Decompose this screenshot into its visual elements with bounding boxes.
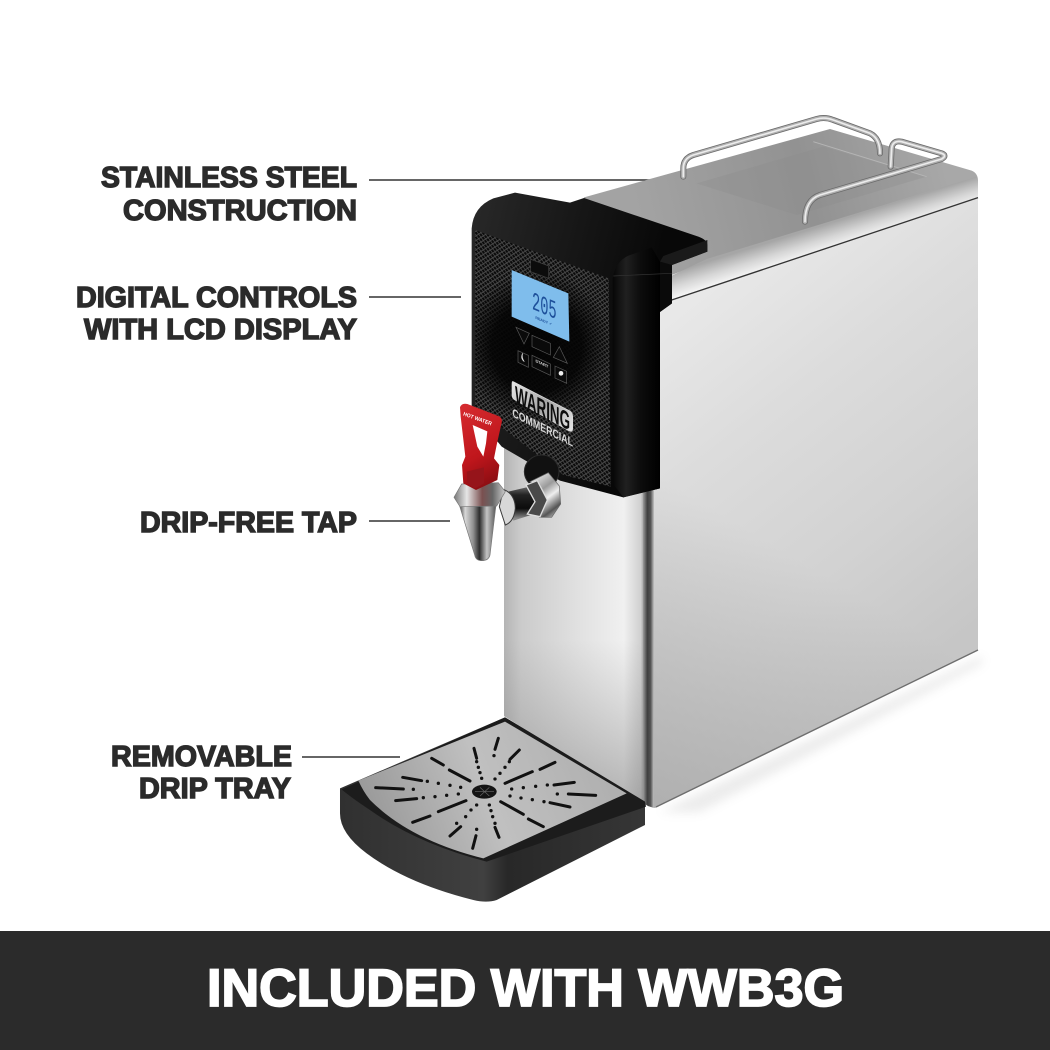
black shell (472, 193, 707, 497)
floor shadow (660, 656, 982, 812)
front handle (805, 141, 944, 222)
rear handle (683, 118, 880, 177)
label: digital controls with LCD display: DIGITAL CONTROLS (76, 282, 357, 314)
front rim (672, 177, 978, 300)
tap spout (459, 505, 496, 561)
banner (0, 931, 1050, 1050)
tap cap (454, 483, 505, 507)
tap mount collar (524, 455, 559, 488)
button glyphs (522, 353, 524, 362)
product: hot water dispenser (340, 118, 982, 902)
Waring Commercial badge (512, 379, 573, 450)
label: removable drip tray: REMOVABLE (111, 741, 292, 773)
banner: INCLUDED WITH WWB3G (207, 959, 844, 1018)
leader line: stainless steel (369, 179, 651, 181)
control panel housing (472, 193, 707, 497)
side panel of dispenser (648, 197, 978, 808)
removable drip tray (340, 717, 646, 902)
red tap handle: HOT WATER (462, 411, 493, 427)
centre drain (472, 785, 497, 799)
LCD display (512, 270, 569, 342)
corner seam (643, 480, 654, 808)
control buttons (516, 327, 567, 383)
control panel housing: START (535, 358, 549, 369)
Waring Commercial badge: COMMERCIAL (512, 405, 573, 450)
top of dispenser with handles (584, 118, 978, 300)
shell side column (613, 247, 660, 497)
label: stainless steel construction: CONSTRUCTION (123, 195, 357, 227)
leader line: drip-free tap (369, 520, 450, 522)
label: digital controls with LCD display: WITH LCD DISPLAY (84, 314, 357, 346)
textured face (475, 230, 611, 487)
label: removable drip tray (111, 741, 292, 805)
top surface (584, 129, 978, 275)
stainless tray top (358, 722, 627, 858)
leader line: digital controls (369, 296, 461, 298)
label: digital controls with LCD display (76, 282, 357, 346)
tray slots (376, 738, 596, 848)
Waring Commercial badge: WARING (515, 381, 570, 436)
label: drip-free tap: DRIP-FREE TAP (140, 507, 357, 539)
LCD display: READY ✓ (535, 316, 552, 327)
label: stainless steel construction: STAINLESS STEEL (101, 162, 357, 194)
label: stainless steel construction (101, 162, 357, 227)
tap connector (508, 485, 542, 521)
front panel of dispenser (504, 440, 645, 806)
tray base (340, 717, 645, 902)
mode button (531, 259, 549, 278)
label: removable drip tray: DRIP TRAY (139, 773, 291, 805)
LCD display: 205 (532, 288, 557, 328)
red tap handle (460, 404, 502, 490)
tray drain holes (412, 754, 559, 831)
leader line: drip tray (302, 756, 400, 758)
drip-free tap (454, 404, 561, 561)
